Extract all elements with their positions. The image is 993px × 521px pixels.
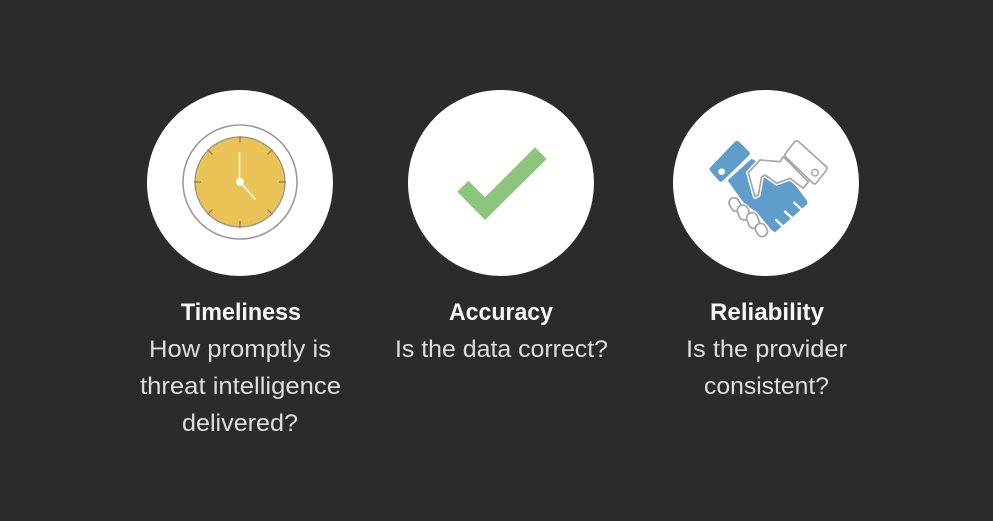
circle: reliability background [673, 90, 859, 276]
fingers [727, 196, 769, 238]
text: reliability question: consistent? [704, 373, 829, 400]
heading: Timeliness: Timeliness [181, 299, 301, 326]
heading: Accuracy: Accuracy [449, 299, 554, 326]
text: timeliness question: delivered? [182, 410, 298, 437]
panel: timeliness [140, 90, 341, 437]
text: timeliness question: threat intelligence [140, 373, 341, 400]
panel: reliability [673, 90, 859, 400]
heading: Reliability: Reliability [710, 299, 825, 326]
text: accuracy question: Is the data correct? [395, 336, 608, 363]
white cuff [785, 141, 827, 184]
blue hand [729, 160, 806, 231]
white hand outline [748, 157, 808, 197]
icon: check mark [408, 90, 594, 276]
panel: accuracy [395, 90, 608, 363]
blue cuff [709, 141, 750, 182]
text: timeliness question [140, 336, 341, 437]
icon: handshake [709, 141, 827, 238]
text: reliability question [686, 336, 847, 400]
icon: clock [147, 90, 333, 276]
text: timeliness question: How promptly is [149, 336, 331, 363]
text: reliability question: Is the provider [686, 336, 847, 363]
